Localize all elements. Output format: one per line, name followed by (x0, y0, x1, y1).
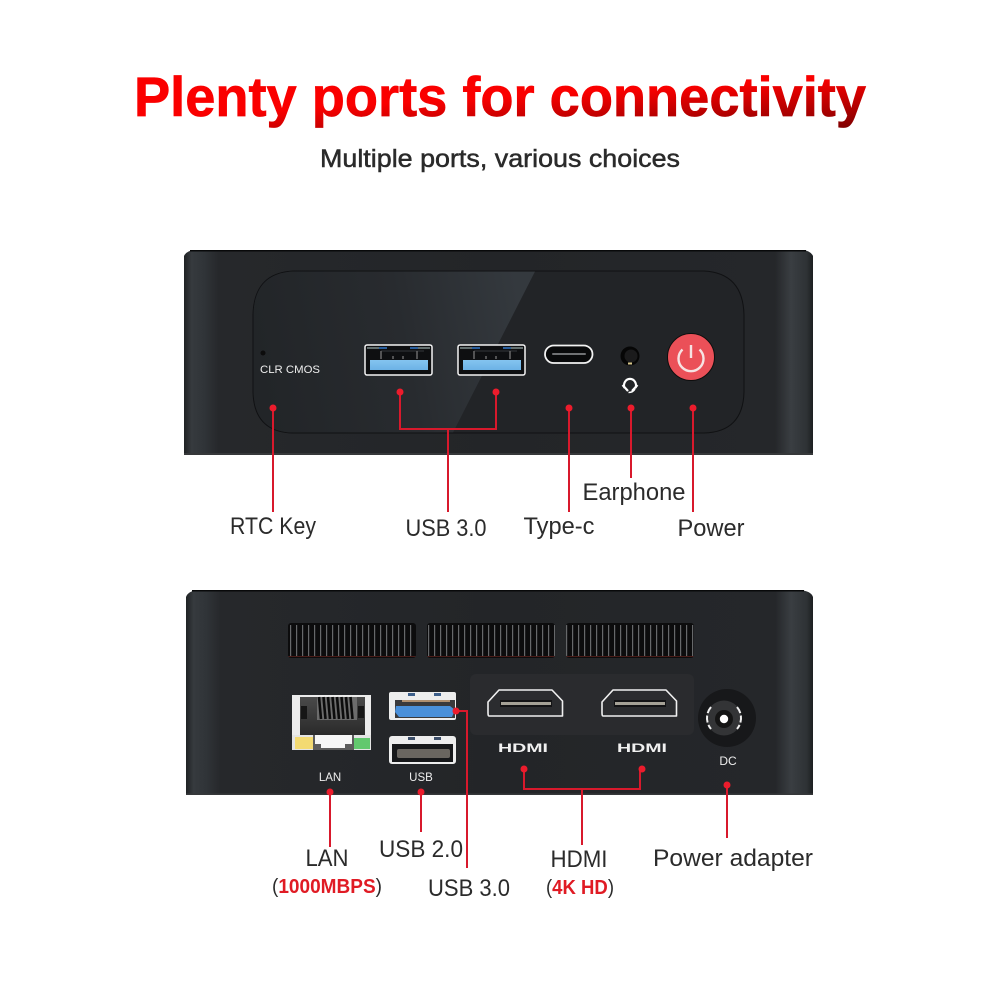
icon: DC jack (698, 689, 756, 747)
label: 4K HD: (4K HD) (546, 877, 614, 899)
icon: USB 3.0 back port (389, 692, 456, 720)
label: HDMI: HDMI (550, 846, 608, 873)
DC small label: DC (719, 754, 737, 768)
label: USB 3.0 back: USB 3.0 (428, 875, 510, 902)
labels: front ports (230, 479, 745, 542)
front recessed panel (253, 271, 744, 433)
label: Power adapter: Power adapter (653, 845, 813, 872)
device body back (186, 590, 813, 795)
vents (288, 623, 694, 658)
callout dots (270, 388, 730, 796)
icon: Type-C port (545, 346, 592, 363)
label: RTC Key: RTC Key (230, 513, 316, 540)
CLR CMOS label (260, 350, 320, 376)
icon: power button (668, 334, 714, 380)
panel: front device (184, 250, 813, 455)
HDMI logo right: HDMI (617, 741, 667, 755)
callout lines (273, 392, 727, 868)
label: Earphone: Earphone (582, 479, 686, 506)
label: USB 2.0: USB 2.0 (379, 836, 463, 863)
USB small label: USB (409, 772, 433, 784)
label: Type-c: Type-c (524, 513, 594, 540)
device body front (184, 250, 813, 455)
HDMI recessed panel (470, 674, 694, 735)
subtitle: Multiple ports, various choices (320, 145, 680, 173)
icon: front USB 3.0 left (365, 345, 432, 375)
icon: earphone jack (620, 346, 640, 392)
icon: HDMI port right (602, 690, 676, 716)
CLR CMOS label: CLR CMOS (260, 364, 320, 376)
icon: front USB 3.0 right (458, 345, 525, 375)
icon: LAN port (292, 695, 371, 750)
label: Power: Power (678, 515, 745, 542)
panel: back device (186, 590, 813, 795)
icon: HDMI port left (488, 690, 562, 716)
LAN small label: LAN (319, 772, 341, 784)
HDMI logo left: HDMI (498, 741, 548, 755)
icon: USB 2.0 back port (389, 736, 456, 764)
label: LAN: LAN (306, 845, 348, 872)
label: USB 3.0 front: USB 3.0 (406, 515, 486, 542)
title: Plenty ports for connectivity (134, 65, 866, 128)
labels: back ports (272, 836, 813, 902)
label: 1000MBPS: (1000MBPS) (272, 876, 382, 898)
